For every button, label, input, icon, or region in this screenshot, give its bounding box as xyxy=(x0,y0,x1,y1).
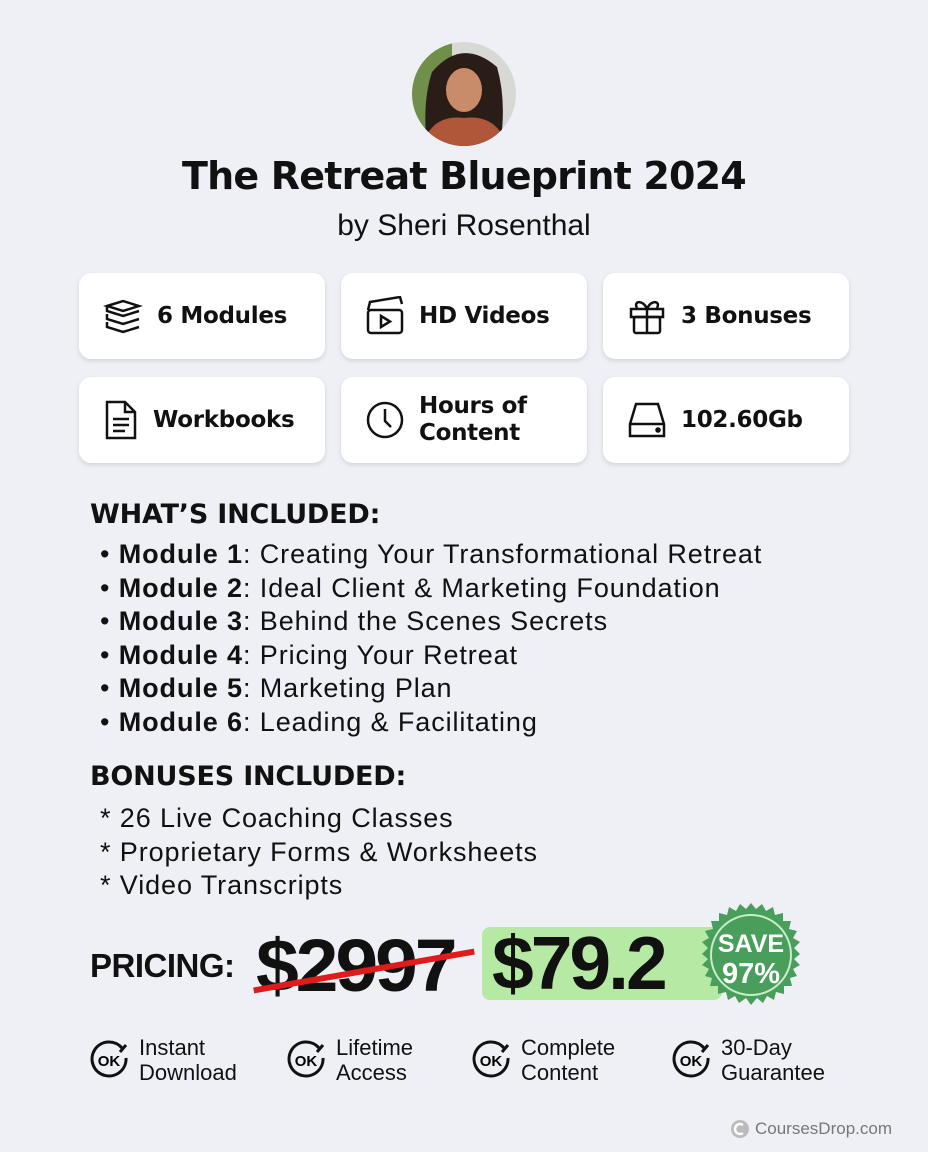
card: hours: Hours of xyxy=(419,393,527,419)
module list: • Module 6: Leading & Facilitating xyxy=(100,707,538,737)
bonus list: * 26 Live Coaching Classes xyxy=(100,803,454,833)
old price: $2997 xyxy=(256,924,454,1007)
guarantee: 30-day: Guarantee xyxy=(721,1060,825,1085)
guarantee: lifetime xyxy=(288,1035,413,1085)
guarantee: instant: OK xyxy=(98,1053,120,1070)
guarantee: lifetime: Access xyxy=(336,1060,407,1085)
guarantee: 30-day: OK xyxy=(680,1053,702,1070)
guarantee: instant: Download xyxy=(139,1060,237,1085)
footer logo: CoursesDrop.com xyxy=(755,1119,892,1138)
guarantee: complete: Complete xyxy=(521,1035,615,1060)
card: bonuses xyxy=(603,273,849,359)
guarantee: complete xyxy=(472,1035,615,1085)
card: hours: Content xyxy=(419,420,520,446)
module list: • Module 3: Behind the Scenes Secrets xyxy=(100,606,608,636)
card: modules: 6 Modules xyxy=(157,302,287,328)
module list: • Module 5: Marketing Plan xyxy=(100,673,452,703)
subtitle: by Sheri Rosenthal xyxy=(337,209,591,242)
card: size xyxy=(603,377,849,463)
guarantee: 30-day: 30-Day xyxy=(721,1035,792,1060)
card: workbooks: Workbooks xyxy=(153,406,294,432)
avatar xyxy=(412,42,516,146)
title: The Retreat Blueprint 2024 xyxy=(182,154,746,198)
card: videos: HD Videos xyxy=(419,302,549,328)
card: workbooks xyxy=(79,377,325,463)
card: hours xyxy=(341,377,587,463)
bonus list: * Proprietary Forms & Worksheets xyxy=(100,837,538,867)
guarantee: instant: Instant xyxy=(139,1035,205,1060)
module list: • Module 4: Pricing Your Retreat xyxy=(100,640,518,670)
card: modules xyxy=(79,273,325,359)
guarantee: lifetime: OK xyxy=(295,1053,317,1070)
new price xyxy=(482,927,722,1000)
save badge xyxy=(702,903,800,1005)
module list xyxy=(100,539,762,737)
new price: $79.2 xyxy=(492,921,665,1005)
save badge: 97% xyxy=(722,958,780,990)
card: size: 102.60Gb xyxy=(681,406,803,432)
heading: bonuses: BONUSES INCLUDED: xyxy=(90,761,406,792)
card: bonuses: 3 Bonuses xyxy=(681,302,811,328)
guarantee: complete: OK xyxy=(480,1053,502,1070)
guarantee: instant xyxy=(90,1035,237,1085)
pricing label: PRICING: xyxy=(90,947,234,984)
card: videos xyxy=(341,273,587,359)
guarantee: complete: Content xyxy=(521,1060,598,1085)
heading: what's included: WHAT’S INCLUDED: xyxy=(90,499,380,530)
module list: • Module 2: Ideal Client & Marketing Foundation xyxy=(100,573,721,603)
bonus list: * Video Transcripts xyxy=(100,870,343,900)
bonus list xyxy=(100,803,538,900)
save badge: SAVE xyxy=(718,930,784,958)
module list: • Module 1: Creating Your Transformational Retreat xyxy=(100,539,762,569)
guarantee: 30-day xyxy=(672,1035,825,1085)
guarantee: lifetime: Lifetime xyxy=(336,1035,413,1060)
